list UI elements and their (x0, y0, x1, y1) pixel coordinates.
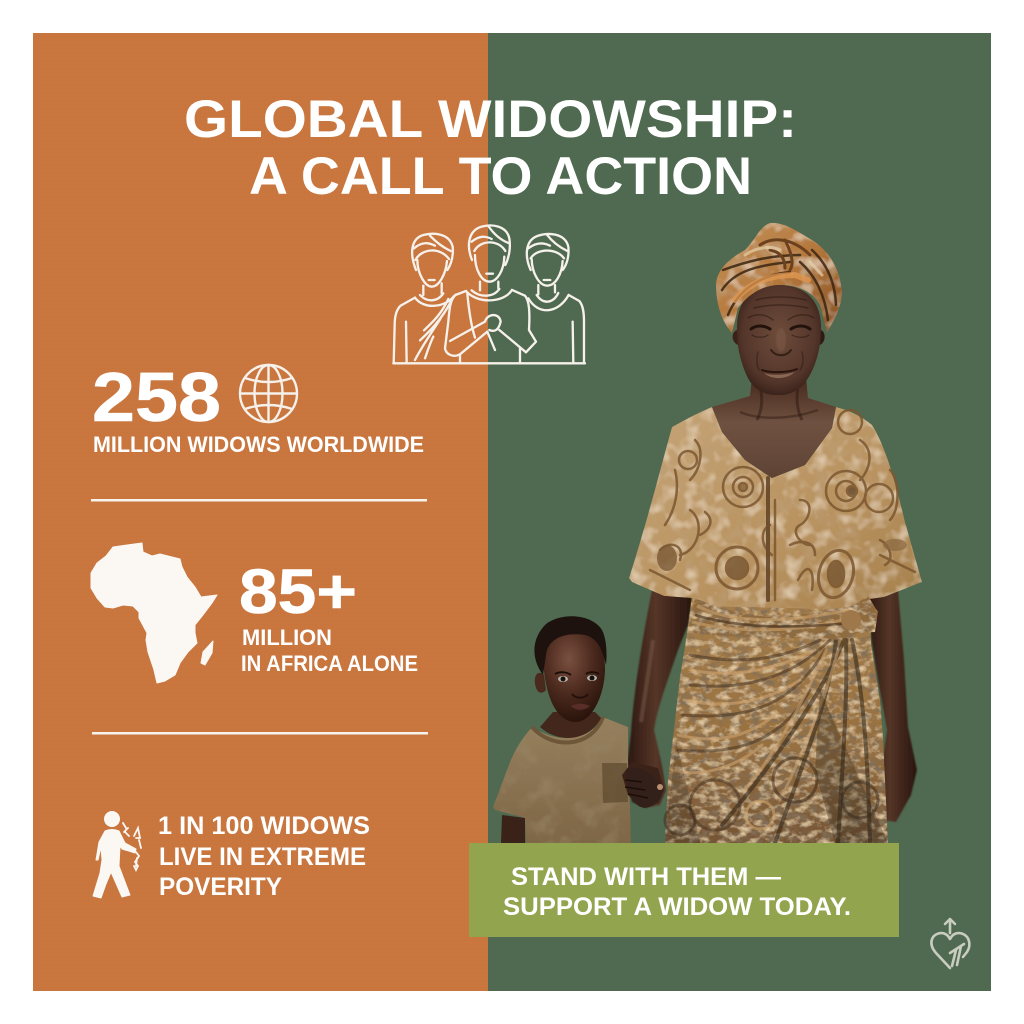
child's features (555, 672, 599, 710)
icon: person with broken chain (93, 811, 141, 898)
panel: green right background (488, 33, 991, 991)
facial features (748, 297, 814, 372)
stat: 85+ million in Africa alone: IN AFRICA ALONE (241, 651, 418, 676)
icon: map of Africa (91, 543, 217, 683)
panel: orange left background (33, 33, 488, 991)
child's arm (501, 815, 525, 843)
right woman (527, 234, 584, 363)
dress pattern (650, 410, 915, 602)
left woman (394, 234, 455, 363)
stat number 258: 258 (92, 358, 221, 436)
icon: heart with upward arrow (931, 919, 969, 968)
centre woman (445, 225, 536, 363)
stat: 1 in 100 widows in extreme poverty (93, 811, 370, 901)
skirt (665, 596, 888, 843)
stat label: MILLION (242, 625, 332, 650)
stat: 1 in 100 widows in extreme poverty: POVERITY (159, 873, 282, 901)
title: GLOBAL WIDOWSHIP: (184, 90, 797, 149)
call to action banner (469, 843, 899, 937)
joined hands (622, 762, 664, 807)
child's hair (534, 616, 607, 675)
stat label: MILLION WIDOWS WORLDWIDE (93, 432, 424, 457)
head wrap (716, 223, 842, 333)
woman's arms (626, 590, 917, 822)
dress bodice and sleeves (629, 407, 922, 610)
child's head (543, 632, 605, 722)
text: 1 IN 100 WIDOWS (158, 812, 370, 840)
stat: 85+ million in Africa alone (91, 543, 418, 683)
neck and chest (712, 378, 836, 478)
icon: three women in headwraps (393, 225, 585, 363)
knotted waist wrap (688, 596, 878, 640)
photo: grandmother (626, 223, 922, 843)
photo: child (493, 616, 664, 843)
stat number 85+: 85+ (239, 557, 357, 627)
face (737, 285, 821, 395)
title: A CALL TO ACTION (249, 147, 752, 206)
call to action banner: SUPPORT A WIDOW TODAY. (503, 893, 851, 921)
title (184, 90, 797, 206)
child's t-shirt (493, 717, 631, 843)
icon: globe (240, 365, 297, 422)
stat: 1 in 100 widows in extreme poverty: LIVE IN EXTREME (159, 843, 366, 871)
child's neck (540, 712, 601, 738)
stat: 258 million widows worldwide (92, 358, 424, 457)
banner text: STAND WITH THEM — (511, 863, 781, 891)
skirt folds (665, 640, 878, 843)
